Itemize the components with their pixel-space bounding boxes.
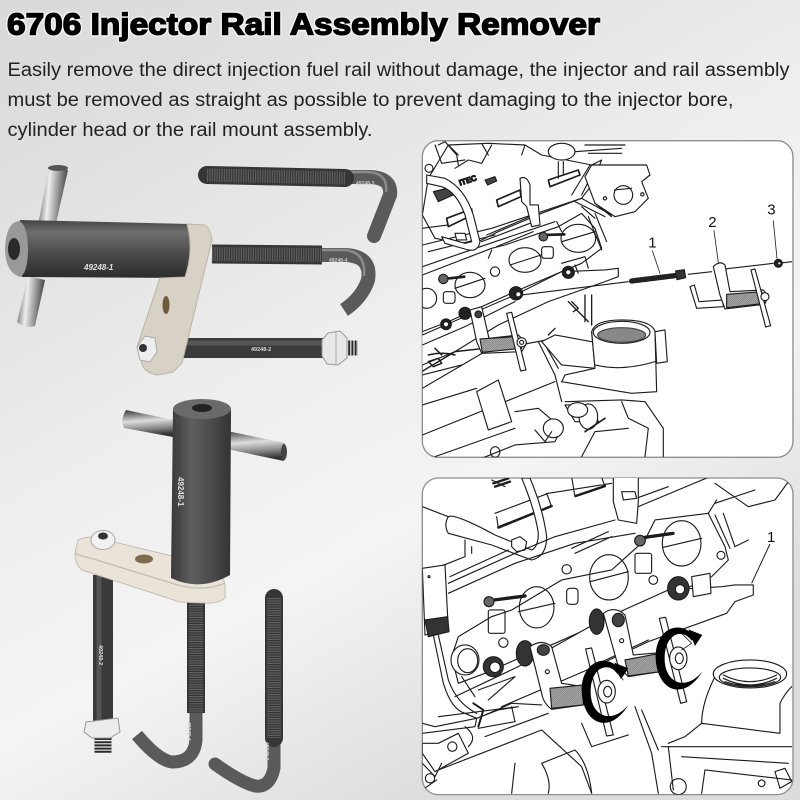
leader and part number [752,529,775,583]
cylinder body 49248-1 [5,220,190,278]
part numbers: 1 [648,235,657,252]
cylinder body 49248-1 [171,399,231,584]
description text: cylinder head or the rail mount assembly. [8,119,373,141]
cover label strips [447,209,472,227]
bolt 49248-3 [207,172,390,236]
cylinder body 49248-1: 49248-1 [176,477,185,507]
part numbers [648,201,776,252]
bolt 49248-4: 49248-4 [329,258,348,264]
title: 6706 Injector Rail Assembly Remover [7,6,600,42]
leader and part number: 1 [767,529,775,546]
part 3: nut [774,259,782,267]
manifold plate and ports [452,513,728,683]
description text: Easily remove the direct injection fuel rail without damage, the injector and rail assembly [8,59,790,81]
T-handle [122,410,287,461]
bolt 49248-2 with nut: 49248-2 [97,645,103,665]
diagram panel: exploded view of tool and engine [417,141,793,458]
diagram panel: removal with turning handles [422,477,793,795]
manifold plate with ports [422,213,602,332]
exploded parts [522,221,792,327]
engine line art [417,142,667,458]
sensor connector and harness [422,565,448,635]
bolt 49248-4 [137,600,196,762]
rotation arrows [582,627,702,723]
bracket plate [75,530,225,603]
sensor [520,177,540,227]
cylinder body 49248-1: 49248-1 [83,263,114,272]
bolt 49248-3: 49248-3 [356,181,375,187]
fuel rail [422,268,618,365]
bolt 49248-3: 49248-3 [263,742,269,761]
description text [8,59,790,141]
bolt 49248-2 with nut: 49248-2 [251,347,271,353]
bolt 49248-3 [215,598,274,786]
engine lower details [422,295,667,458]
photo: assembled tool, vertical [75,399,287,786]
engine line art [422,477,792,795]
bolt 49248-4 [212,250,369,310]
bracket plate [137,224,212,375]
cover right lug [585,165,650,217]
part numbers: 2 [708,214,717,231]
T-handle [17,165,68,327]
installed tool [470,307,527,371]
throttle body [542,332,595,368]
centre sensor post [613,477,638,523]
bolt 49248-2 with nut [178,331,358,365]
part numbers: 3 [767,201,776,218]
throttle body [662,660,792,795]
installed tools with hatched bars [530,610,692,736]
engine line art: ITEC [458,173,478,188]
oil cap [548,143,575,160]
fuel rail [455,585,753,707]
part 2: bracket [690,285,723,308]
cover and tube [422,477,792,528]
breather tube [427,175,480,250]
photo: disassembled tool, horizontal [5,165,390,375]
bolt 49248-4: 49248-4 [185,722,191,741]
bolt 49248-2 with nut [84,575,120,754]
part 1: stud [632,276,675,281]
valve cover [422,143,602,245]
description text: must be removed as straight as possible to prevent damaging to the injector bore, [8,89,734,111]
